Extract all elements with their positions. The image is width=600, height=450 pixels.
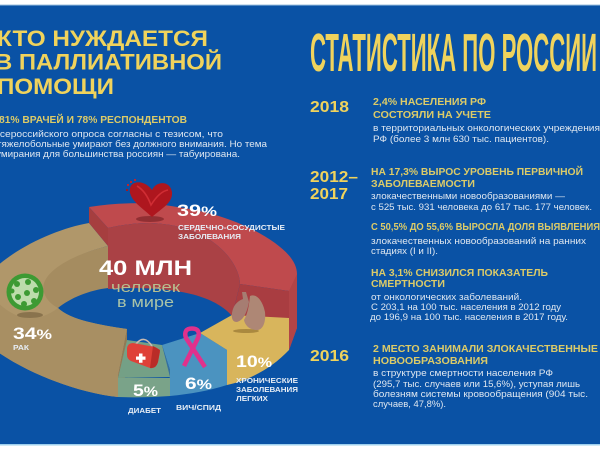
panel: statistics for Russia <box>310 23 600 410</box>
year: 2012–2017 <box>310 169 358 203</box>
title: who needs care: ПОМОЩИ <box>0 74 114 99</box>
entry: 2018: РФ (более 3 млн 630 тыс. пациентов). <box>373 134 549 145</box>
label: HIV: 6% <box>185 374 213 393</box>
entry: 2018: СОСТОЯЛИ НА УЧЕТЕ <box>373 110 491 121</box>
icon: pink ribbon <box>184 328 205 367</box>
entry: incidence growth <box>371 165 592 213</box>
intro text block: тяжелобольные умирают без должного внимания. Но тема <box>0 139 268 150</box>
icon: virus <box>6 274 44 318</box>
label: diabetes: ДИАБЕТ <box>128 406 161 415</box>
title: who needs care <box>0 26 222 99</box>
label: cardiovascular: СЕРДЕЧНО-СОСУДИСТЫЕ <box>178 223 285 232</box>
entry: 2016: НОВООБРАЗОВАНИЯ <box>373 356 488 367</box>
entry: mortality decline: НА 3,1% СНИЗИЛСЯ ПОКАЗАТЕЛЬ <box>371 268 548 279</box>
entry: 2016: болезням системы кровообращения (904 тыс. <box>373 389 588 400</box>
entry: 2016: случаев, 47,8%). <box>373 399 446 410</box>
center label: 40 million: человек <box>111 279 181 296</box>
entry: 2016: в структуре смертности населения РФ <box>373 368 553 379</box>
panel: who needs palliative care <box>0 26 298 415</box>
label: cardiovascular: 39 % <box>177 201 218 220</box>
label: cancer: РАК <box>13 343 29 352</box>
entry: 2016 <box>373 344 598 410</box>
year: 2018: 2018 <box>310 99 349 116</box>
entry: incidence growth: с 525 тыс. 931 человека до 617 тыс. 177 человек. <box>371 202 592 213</box>
entry: early detection <box>371 222 600 257</box>
entry: incidence growth: НА 17,3% ВЫРОС УРОВЕНЬ ПЕРВИЧНОЙ <box>371 165 583 178</box>
entry: early detection: злокачественных новообразований на ранних <box>371 236 586 247</box>
segment: diabetes 5% <box>118 340 170 397</box>
segment: cancer 34% <box>0 223 127 397</box>
icon: first aid case <box>127 339 160 368</box>
label: lungs: ЛЕГКИХ <box>236 394 268 403</box>
entry: mortality decline: от онкологических заболеваний. <box>371 292 522 303</box>
entry: mortality decline: СМЕРТНОСТИ <box>371 279 445 290</box>
entry: 2016: (295,7 тыс. случаев или 15,6%), уступая лишь <box>373 379 580 390</box>
entry: 2018: в территориальных онкологических учреждениях <box>373 123 600 134</box>
intro text block: 81% ВРАЧЕЙ И 78% РЕСПОНДЕНТОВ <box>0 113 187 126</box>
entry: mortality decline: до 196,9 на 100 тыс. населения в 2017 году. <box>370 312 568 323</box>
entry: mortality decline: С 203,1 на 100 тыс. населения в 2012 году <box>371 302 561 313</box>
title: who needs care: КТО НУЖДАЕТСЯ <box>0 26 208 51</box>
label: cardiovascular: ЗАБОЛЕВАНИЯ <box>178 232 241 241</box>
center label: 40 million: 40 МЛН <box>99 257 192 280</box>
label: cancer <box>13 324 53 352</box>
entry: 2016: 2 МЕСТО ЗАНИМАЛИ ЗЛОКАЧЕСТВЕННЫЕ <box>373 344 598 355</box>
segment: HIV 6% <box>162 333 227 396</box>
label: diabetes: 5% <box>133 381 159 400</box>
entry: incidence growth: злокачественными новообразованиями — <box>371 191 566 202</box>
label: HIV <box>176 374 222 412</box>
label: HIV: ВИЧ/СПИД <box>176 403 222 412</box>
center label: 40 million <box>99 257 192 311</box>
icon: lungs <box>232 292 265 333</box>
entry: 2018: 2,4% НАСЕЛЕНИЯ РФ <box>373 97 486 108</box>
entry: early detection: стадиях (I и II). <box>371 246 438 257</box>
label: cardiovascular <box>177 201 285 241</box>
year: 2016: 2016 <box>310 348 349 365</box>
segment: cardiovascular 39% <box>89 203 297 350</box>
entry: mortality decline <box>370 268 568 323</box>
intro text block <box>0 113 268 160</box>
label: cancer: 34 % <box>13 324 53 343</box>
entry: 2018 <box>373 97 600 145</box>
label: lungs: ЗАБОЛЕВАНИЯ <box>236 385 298 394</box>
label: lungs: ХРОНИЧЕСКИЕ <box>236 376 298 385</box>
year: 2012–2017: 2012– <box>310 169 358 186</box>
label: lungs: 10% <box>236 352 273 371</box>
icon: heart <box>126 179 172 222</box>
year: 2012–2017: 2017 <box>310 186 348 203</box>
title: who needs care: В ПАЛЛИАТИВНОЙ <box>0 50 222 74</box>
donut chart: causes <box>0 179 297 397</box>
center label: 40 million: в мире <box>117 294 174 311</box>
segment: chronic lung disease 10% <box>200 315 289 385</box>
label: diabetes <box>128 381 161 415</box>
label: lungs <box>236 352 298 403</box>
intro text block: умирания для большинства россиян — табуирована. <box>0 149 240 160</box>
entry: incidence growth: ЗАБОЛЕВАЕМОСТИ <box>371 179 475 190</box>
